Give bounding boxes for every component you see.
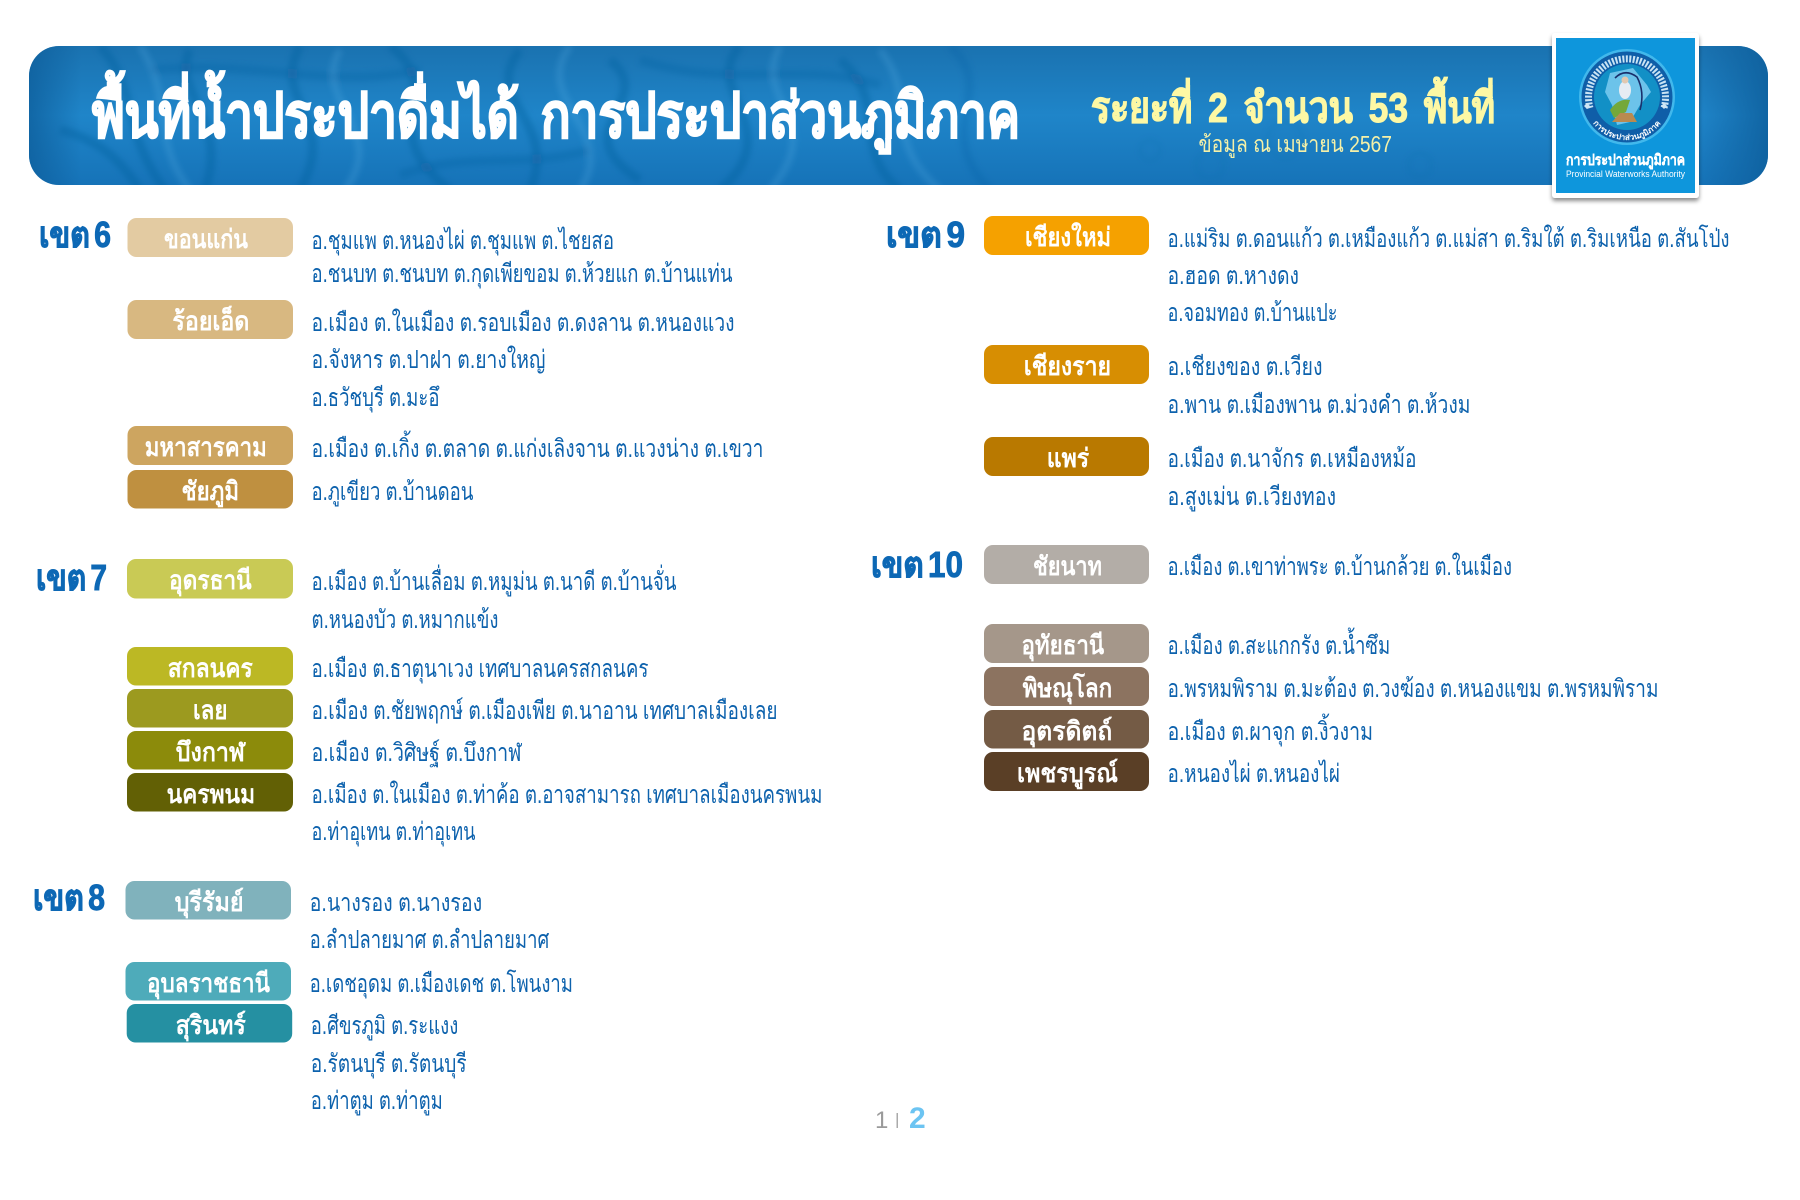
- row: Phetchabun: เพชรบูรณ์: [1017, 758, 1118, 790]
- logo card: [1549, 34, 1702, 204]
- heading: zone 8: เขต 8: [33, 877, 105, 918]
- row: Maha Sarakham: [128, 426, 764, 465]
- row: Nakhon Phanom: [127, 773, 822, 847]
- heading: zone 6: เขต 6: [39, 214, 111, 255]
- row: Roi Et: ร้อยเอ็ด: [172, 305, 249, 336]
- row: Chai Nat: [984, 545, 1512, 584]
- row: Buri Ram: [126, 881, 549, 954]
- row: Chiang Mai: [984, 216, 1730, 327]
- row: Roi Et: อ.ธวัชบุรี ต.มะอึ: [312, 384, 440, 413]
- row: Khon Kaen: [128, 218, 732, 289]
- data date: ข้อมูล ณ เมษายน 2567: [1198, 131, 1392, 158]
- row: Ubon Ratchathani: อุบลราชธานี: [147, 968, 270, 1000]
- row: Phrae: [984, 437, 1416, 512]
- row: Buri Ram: อ.นางรอง ต.นางรอง: [310, 889, 482, 917]
- row: Surin: อ.ศีขรภูมิ ต.ระแงง: [311, 1012, 458, 1041]
- row: Loei: อ.เมือง ต.ชัยพฤกษ์ ต.เมืองเพีย ต.นาอาน เทศบาลเมืองเลย: [312, 697, 778, 725]
- row: Udon Thani: [127, 559, 676, 634]
- row: Uthai Thani: [984, 624, 1390, 663]
- logo thai name: การประปาส่วนภูมิภาค: [1566, 151, 1685, 170]
- row: Chiang Mai: อ.ฮอด ต.หางดง: [1168, 262, 1299, 290]
- row: Chaiyaphum: ชัยภูมิ: [182, 476, 239, 508]
- row: Buri Ram: บุรีรัมย์: [175, 887, 244, 919]
- phase subtitle: ระยะที่ 2 จำนวน 53 พื้นที่: [1091, 76, 1495, 131]
- row: Bueng Kan: บึงกาฬ: [176, 737, 246, 767]
- row: Chaiyaphum: อ.ภูเขียว ต.บ้านดอน: [312, 478, 474, 507]
- panel: zone 6: [39, 214, 764, 508]
- row: Chiang Rai: เชียงราย: [1024, 351, 1111, 381]
- row: Nakhon Phanom: อ.ท่าอุเทน ต.ท่าอุเทน: [312, 818, 476, 847]
- logo english name: Provincial Waterworks Authority: [1566, 169, 1685, 179]
- row: Udon Thani: ต.หนองบัว ต.หมากแข้ง: [312, 606, 498, 634]
- row: Uttaradit: อ.เมือง ต.ผาจุก ต.งิ้วงาม: [1168, 713, 1373, 747]
- row: Bueng Kan: [127, 731, 522, 770]
- row: Roi Et: อ.เมือง ต.ในเมือง ต.รอบเมือง ต.ดงลาน ต.หนองแวง: [312, 308, 734, 337]
- row: Uthai Thani: อ.เมือง ต.สะแกกรัง ต.น้ำซึม: [1168, 627, 1390, 660]
- row: Nakhon Phanom: นครพนม: [167, 779, 255, 809]
- row: Chiang Rai: [984, 345, 1470, 419]
- row: Sakon Nakhon: สกลนคร: [168, 653, 253, 683]
- icon: seal: [1579, 49, 1675, 145]
- page number: 2: [909, 1102, 926, 1135]
- row: Sakon Nakhon: อ.เมือง ต.ธาตุนาเวง เทศบาลนครสกลนคร: [312, 655, 648, 684]
- row: Nakhon Phanom: อ.เมือง ต.ในเมือง ต.ท่าค้อ ต.อาจสามารถ เทศบาลเมืองนครพนม: [312, 780, 822, 809]
- panel: zone 8: [33, 877, 573, 1116]
- row: Uttaradit: [984, 710, 1373, 748]
- row: Surin: อ.รัตนบุรี ต.รัตนบุรี: [311, 1050, 467, 1079]
- row: Loei: เลย: [193, 695, 228, 725]
- row: Chiang Rai: อ.พาน ต.เมืองพาน ต.ม่วงคำ ต.ห้วงม: [1168, 391, 1470, 419]
- header banner: [29, 46, 1768, 190]
- row: Phrae: อ.สูงเม่น ต.เวียงทอง: [1168, 483, 1336, 512]
- row: Ubon Ratchathani: [126, 962, 573, 1000]
- row: Phitsanulok: อ.พรหมพิราม ต.มะต้อง ต.วงฆ้อง ต.หนองแขม ต.พรหมพิราม: [1168, 675, 1658, 703]
- row: Chiang Mai: อ.จอมทอง ต.บ้านแปะ: [1168, 299, 1338, 327]
- row: Roi Et: อ.จังหาร ต.ปาฝา ต.ยางใหญ่: [312, 345, 546, 374]
- row: Khon Kaen: ขอนแก่น: [164, 224, 248, 254]
- panel: zone 9: [886, 214, 1730, 512]
- row: Surin: [127, 1004, 467, 1116]
- row: Chiang Mai: เชียงใหม่: [1025, 222, 1111, 252]
- row: Phrae: แพร่: [1047, 443, 1089, 473]
- row: Bueng Kan: อ.เมือง ต.วิศิษฐ์ ต.บึงกาฬ: [312, 739, 522, 767]
- row: Chai Nat: อ.เมือง ต.เขาท่าพระ ต.บ้านกล้วย ต.ในเมือง: [1168, 552, 1512, 581]
- page number: 1: [875, 1107, 888, 1134]
- row: Buri Ram: อ.ลำปลายมาศ ต.ลำปลายมาศ: [310, 926, 549, 954]
- row: Ubon Ratchathani: อ.เดชอุดม ต.เมืองเดช ต.โพนงาม: [310, 969, 573, 999]
- row: Udon Thani: อ.เมือง ต.บ้านเลื่อม ต.หมูม่น ต.นาดี ต.บ้านจั่น: [312, 564, 676, 597]
- row: Sakon Nakhon: [127, 647, 648, 686]
- row: Khon Kaen: อ.ชนบท ต.ชนบท ต.กุดเพียขอม ต.ห้วยแก ต.บ้านแท่น: [312, 260, 732, 289]
- heading: zone 10: เขต 10: [871, 544, 963, 585]
- seal ring text: การประปาส่วนภูมิภาค: [1593, 121, 1661, 140]
- row: Roi Et: [128, 300, 734, 413]
- row: Maha Sarakham: มหาสารคาม: [145, 432, 267, 462]
- row: Chai Nat: ชัยนาท: [1033, 551, 1102, 581]
- row: Maha Sarakham: อ.เมือง ต.เกิ้ง ต.ตลาด ต.แก่งเลิงจาน ต.แวงน่าง ต.เขวา: [312, 430, 764, 463]
- heading: zone 7: เขต 7: [36, 557, 107, 598]
- row: Uthai Thani: อุทัยธานี: [1022, 630, 1104, 662]
- row: Chaiyaphum: [128, 470, 474, 508]
- panel: zone 7: [36, 557, 822, 847]
- row: Surin: อ.ท่าตูม ต.ท่าตูม: [311, 1087, 443, 1116]
- row: Phetchabun: [984, 752, 1340, 791]
- row: Khon Kaen: อ.ชุมแพ ต.หนองไผ่ ต.ชุมแพ ต.ไชยสอ: [312, 226, 614, 256]
- row: Uttaradit: อุตรดิตถ์: [1022, 716, 1112, 748]
- row: Udon Thani: อุดรธานี: [169, 565, 252, 597]
- page number: [875, 1102, 926, 1135]
- row: Loei: [127, 689, 778, 728]
- row: Phitsanulok: [984, 667, 1658, 706]
- row: Chiang Rai: อ.เชียงของ ต.เวียง: [1168, 353, 1322, 381]
- row: Phetchabun: อ.หนองไผ่ ต.หนองไผ่: [1168, 759, 1340, 788]
- title: พื้นที่น้ำประปาดื่มได้ การประปาส่วนภูมิภาค: [92, 70, 1020, 154]
- panel: zone 10: [871, 544, 1658, 791]
- row: Phrae: อ.เมือง ต.นาจักร ต.เหมืองหม้อ: [1168, 445, 1416, 473]
- heading: zone 9: เขต 9: [886, 214, 965, 255]
- row: Surin: สุรินทร์: [176, 1010, 246, 1042]
- row: Phitsanulok: พิษณุโลก: [1023, 672, 1112, 705]
